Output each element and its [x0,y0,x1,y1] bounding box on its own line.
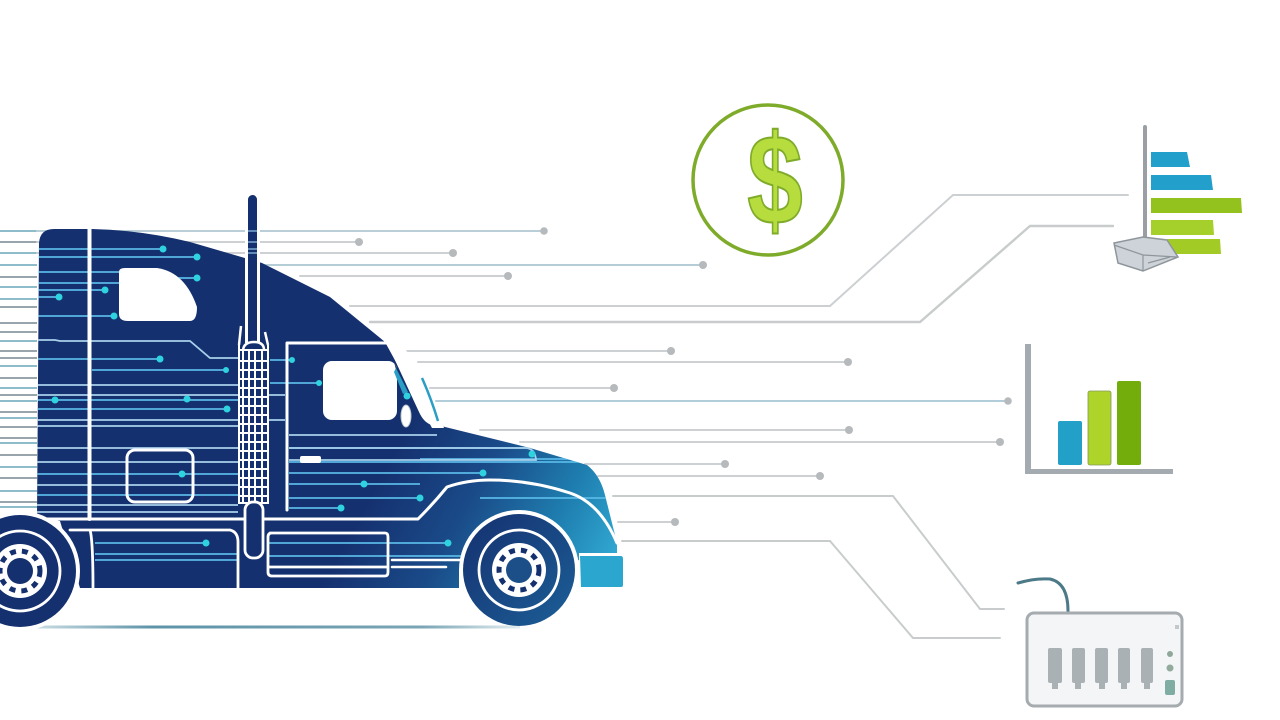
side compartment [127,450,193,502]
icon: dollar coin: $ [747,109,803,252]
connector to top-right chart [350,195,1128,306]
line to dot, y 388 [430,384,618,392]
connector to router, upper [613,496,1004,609]
front wheel [459,510,579,626]
lower fairing outline [70,530,238,589]
truck body [37,229,617,588]
engine intake grille [238,326,269,503]
line to dot, y 442 [520,438,1004,446]
data lines with end dots [37,195,1128,638]
line to dot, y 276 [300,272,512,280]
line to dot, y 464 [585,460,729,468]
teal bar [1058,421,1082,465]
connector to router, lower [622,541,1000,638]
line to dot, y 253 [37,249,457,257]
white frame lines [37,228,617,589]
glowing circuit nodes [52,246,536,546]
lower exhaust canister [245,502,263,558]
dark green bar [1117,381,1141,465]
connector to top-right device [370,226,1113,322]
icon: dollar coin [693,105,843,255]
bars [1151,152,1242,254]
icon: router device [1018,579,1182,706]
exhaust stack [245,195,260,350]
cab side window [323,361,397,420]
cab door frame [287,343,392,510]
icon: horizontal bar chart with device [1114,125,1242,271]
icon: vertical bar chart [1025,344,1173,474]
line to dot, y 430 [480,426,853,434]
light green bar [1088,391,1111,465]
cable [1018,579,1068,611]
line to dot, y 231 [37,227,548,235]
side mirror [401,405,411,427]
line to dot, y 522 [618,518,679,526]
line to dot, y 351 [405,347,675,355]
axes [1025,344,1173,474]
front bumper [580,556,623,587]
door handle [300,456,321,463]
rear sleeper window [119,268,197,321]
truck illustration [0,195,623,631]
device [1114,237,1178,271]
vertical axis [1143,125,1147,240]
chassis and fender line [37,480,617,543]
circuit lines on body [37,249,610,560]
line to dot, y 242 [37,238,363,246]
line to dot, y 401 [436,397,1012,405]
line to dot, y 265 [262,261,707,269]
line to dot, y 476 [598,472,824,480]
speed lines behind the truck [0,231,37,507]
device box [1027,613,1182,706]
rear wheel [0,511,80,631]
step line [392,560,460,567]
line to dot, y 362 [418,358,852,366]
indicator lights [1165,625,1179,695]
ground shadow line [30,626,520,628]
ports [1048,648,1153,689]
windshield [385,342,444,428]
rear vertical divider [88,228,92,519]
fuel tank [268,533,388,576]
